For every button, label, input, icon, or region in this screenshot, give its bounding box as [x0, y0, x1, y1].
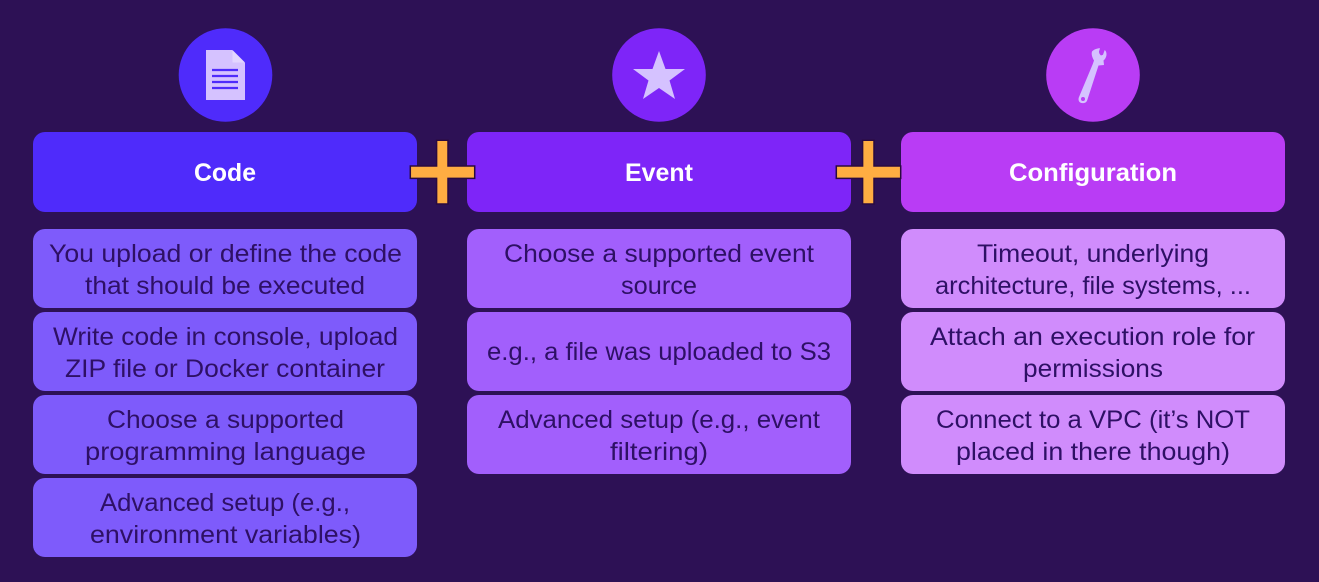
- text block: advanced setup: [33, 478, 417, 557]
- text block: event filtering: [467, 395, 851, 474]
- heading: Configuration: [901, 132, 1285, 212]
- text block: file upload example: e.g., a file was uploaded to S3: [487, 338, 831, 366]
- text block: event filtering: filtering): [610, 438, 708, 466]
- text block: write code: ZIP file or Docker container: [65, 355, 385, 383]
- column: Configuration: [901, 28, 1285, 474]
- text block: event source: Choose a supported event: [504, 240, 814, 268]
- text block: programming language: programming language: [85, 438, 366, 466]
- heading: Configuration: Configuration: [1009, 159, 1177, 187]
- text block: event source: [467, 229, 851, 308]
- text block: programming language: Choose a supported: [107, 406, 344, 434]
- icon: wrench: [1046, 28, 1140, 122]
- heading: Code: [33, 132, 417, 212]
- heading: Code: Code: [194, 159, 256, 187]
- text block: timeout and architecture: [901, 229, 1285, 308]
- heading: Event: Event: [625, 159, 694, 187]
- text block: VPC connection: Connect to a VPC (it’s NOT: [936, 406, 1250, 434]
- text block: write code: [33, 312, 417, 391]
- text block: write code: Write code in console, upload: [53, 323, 398, 351]
- heading: Event: [467, 132, 851, 212]
- text block: event filtering: Advanced setup (e.g., event: [498, 406, 820, 434]
- text block: programming language: [33, 395, 417, 474]
- text block: upload or define code: You upload or define the code: [49, 240, 402, 268]
- text block: upload or define code: [33, 229, 417, 308]
- text block: advanced setup: environment variables): [90, 521, 361, 549]
- text block: upload or define code: that should be executed: [85, 272, 365, 300]
- text block: advanced setup: Advanced setup (e.g.,: [100, 489, 350, 517]
- icon: document: [179, 28, 272, 122]
- text block: timeout and architecture: architecture, file systems, ...: [935, 272, 1251, 300]
- plus sign: Code + Event: [410, 140, 475, 204]
- text block: execution role: Attach an execution role for: [930, 323, 1255, 351]
- icon: star: [612, 28, 706, 122]
- column: Code: [33, 28, 417, 557]
- column: Event: [467, 28, 851, 474]
- text block: timeout and architecture: Timeout, underlying: [977, 240, 1209, 268]
- text block: event source: source: [621, 272, 697, 300]
- text block: VPC connection: placed in there though): [956, 438, 1230, 466]
- text block: execution role: permissions: [1023, 355, 1163, 383]
- text block: file upload example: [467, 312, 851, 391]
- text block: execution role: [901, 312, 1285, 391]
- plus sign: Event + Configuration: [836, 140, 901, 204]
- text block: VPC connection: [901, 395, 1285, 474]
